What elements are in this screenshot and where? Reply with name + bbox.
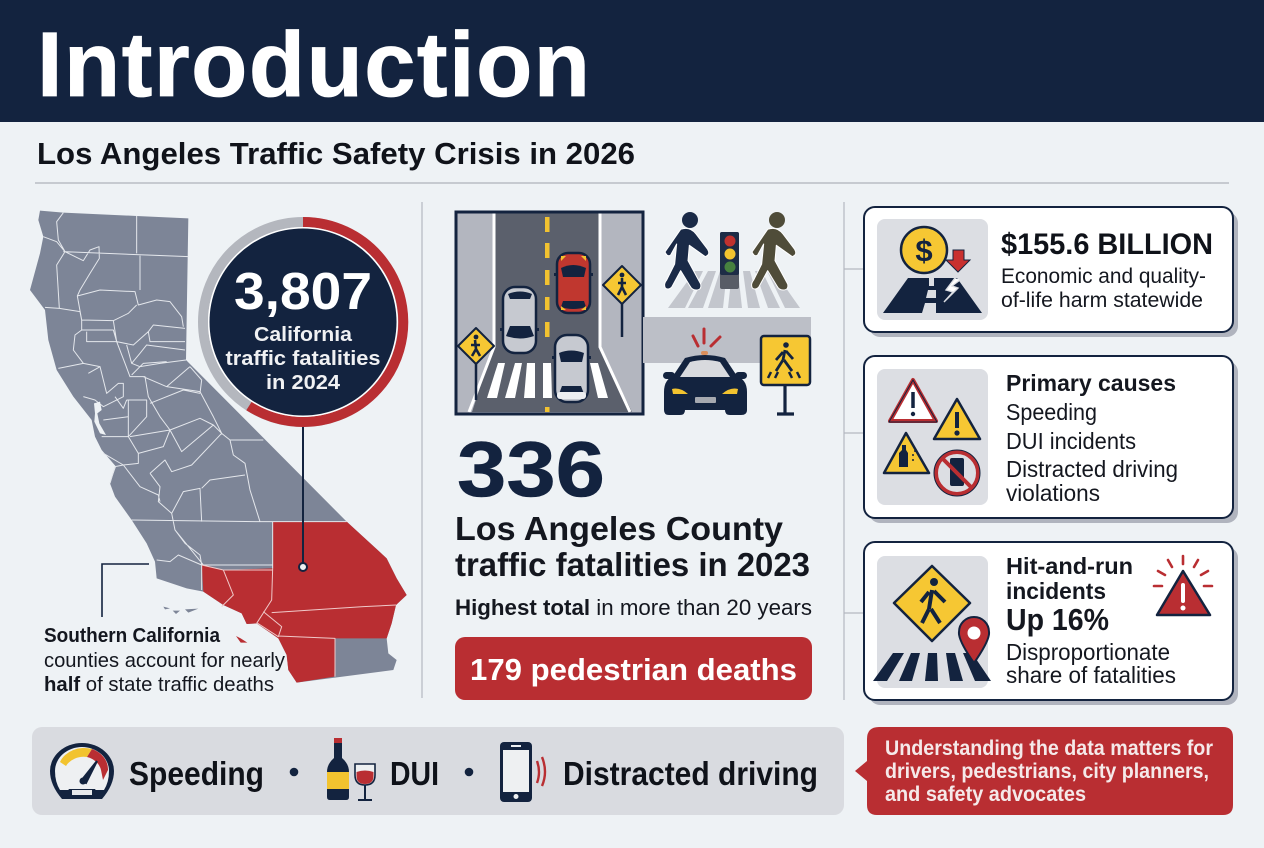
icon: pedestrian crossing sign and pin [873,556,991,688]
icon: coin and cracked road: $ [915,233,933,268]
panel: primary causes card [864,356,1238,523]
text: Southern California note [44,625,286,696]
label: Distracted driving: Distracted driving [563,755,818,792]
text: hit-and-run: share of fatalities [1006,662,1176,688]
icon: pedestrian sign right [603,266,641,337]
icon: crosswalk sign [761,336,810,414]
icon: phone with signal [500,742,545,802]
text: LA County fatalities [455,510,810,583]
icon: pedestrian dark [665,212,709,290]
stat circle: 3,807: traffic fatalities [226,347,380,370]
text: primary causes list [1006,370,1178,506]
callout leader: Southern California [102,564,149,617]
icon: front view car with alert [663,329,747,415]
icon: traffic light [720,232,739,289]
text: primary causes list: DUI incidents [1006,428,1136,454]
stat circle: 3,807: California [254,323,353,346]
road scene [456,212,643,414]
panel: Los Angeles County statistic [455,425,812,700]
icon: red car [554,253,593,313]
stat circle: 3,807: in 2024 [266,371,341,394]
text: primary causes list: Primary causes [1006,370,1176,396]
pill: pedestrian deaths [455,637,812,700]
icon: coin and cracked road [877,219,988,320]
stat circle: 3,807 [203,222,403,422]
leader line to map [299,425,307,571]
text: highest total: Highest total in more than 20 years [455,595,812,620]
text: economic harm description: of-life harm statewide [1001,289,1203,312]
text: LA County fatalities: Los Angeles County [455,510,784,547]
text: Southern California note: Southern California [44,625,221,647]
callout: understanding the data: drivers, pedestrians, city planners, [885,760,1209,783]
text: $155.6 billion: $155.6 BILLION [1001,228,1213,261]
text: economic harm description [1001,265,1206,312]
bullet [290,768,298,776]
panel: California map [30,211,407,696]
text: LA County fatalities: traffic fatalities in 2023 [455,546,810,583]
text: primary causes list: Speeding [1006,399,1097,425]
callout: understanding the data [855,727,1233,815]
header banner [0,0,1264,122]
icon: bottle and wine glass [327,738,375,800]
callout: understanding the data: and safety advocates [885,783,1086,806]
text: hit-and-run: Up 16% [1006,602,1109,637]
text: Southern California note: half of state traffic deaths [44,673,274,696]
icon: alert triangle [1154,556,1212,615]
label: DUI: DUI [390,755,439,792]
bottom bar: risk factors [32,727,844,815]
icon: silver car right [552,335,591,402]
label: Speeding: Speeding [129,755,264,792]
callout: understanding the data: Understanding the data matters for [885,737,1213,760]
subtitle: Los Angeles Traffic Safety Crisis in 2026 [37,136,635,171]
text: hit-and-run: Hit-and-run [1006,553,1133,579]
icon: pedestrian sign left [458,328,494,400]
panel: economic harm card [864,207,1238,337]
stat circle: 3,807: 3,807 [234,263,372,321]
text: primary causes list: violations [1006,480,1100,506]
icon: pedestrian olive [752,212,796,290]
title: Introduction [37,14,590,116]
icon: silver car left [500,287,539,353]
text: economic harm description: Economic and quality- [1001,265,1206,288]
text: hit-and-run: Disproportionate [1006,639,1170,665]
map of California counties [30,211,407,683]
text: Southern California note: counties account for nearly [44,649,286,672]
bullet [465,768,473,776]
icon: warning signs [877,369,988,505]
text: hit-and-run [1006,553,1176,688]
text: hit-and-run: incidents [1006,578,1106,604]
crosswalk with pedestrians [643,212,811,363]
panel: road illustration [456,212,811,415]
big number 336: 336 [457,425,605,513]
pill: pedestrian deaths: 179 pedestrian deaths [470,652,797,687]
icon: speedometer [50,743,114,799]
text: primary causes list: Distracted driving [1006,456,1178,482]
panel: hit-and-run card [864,542,1238,705]
